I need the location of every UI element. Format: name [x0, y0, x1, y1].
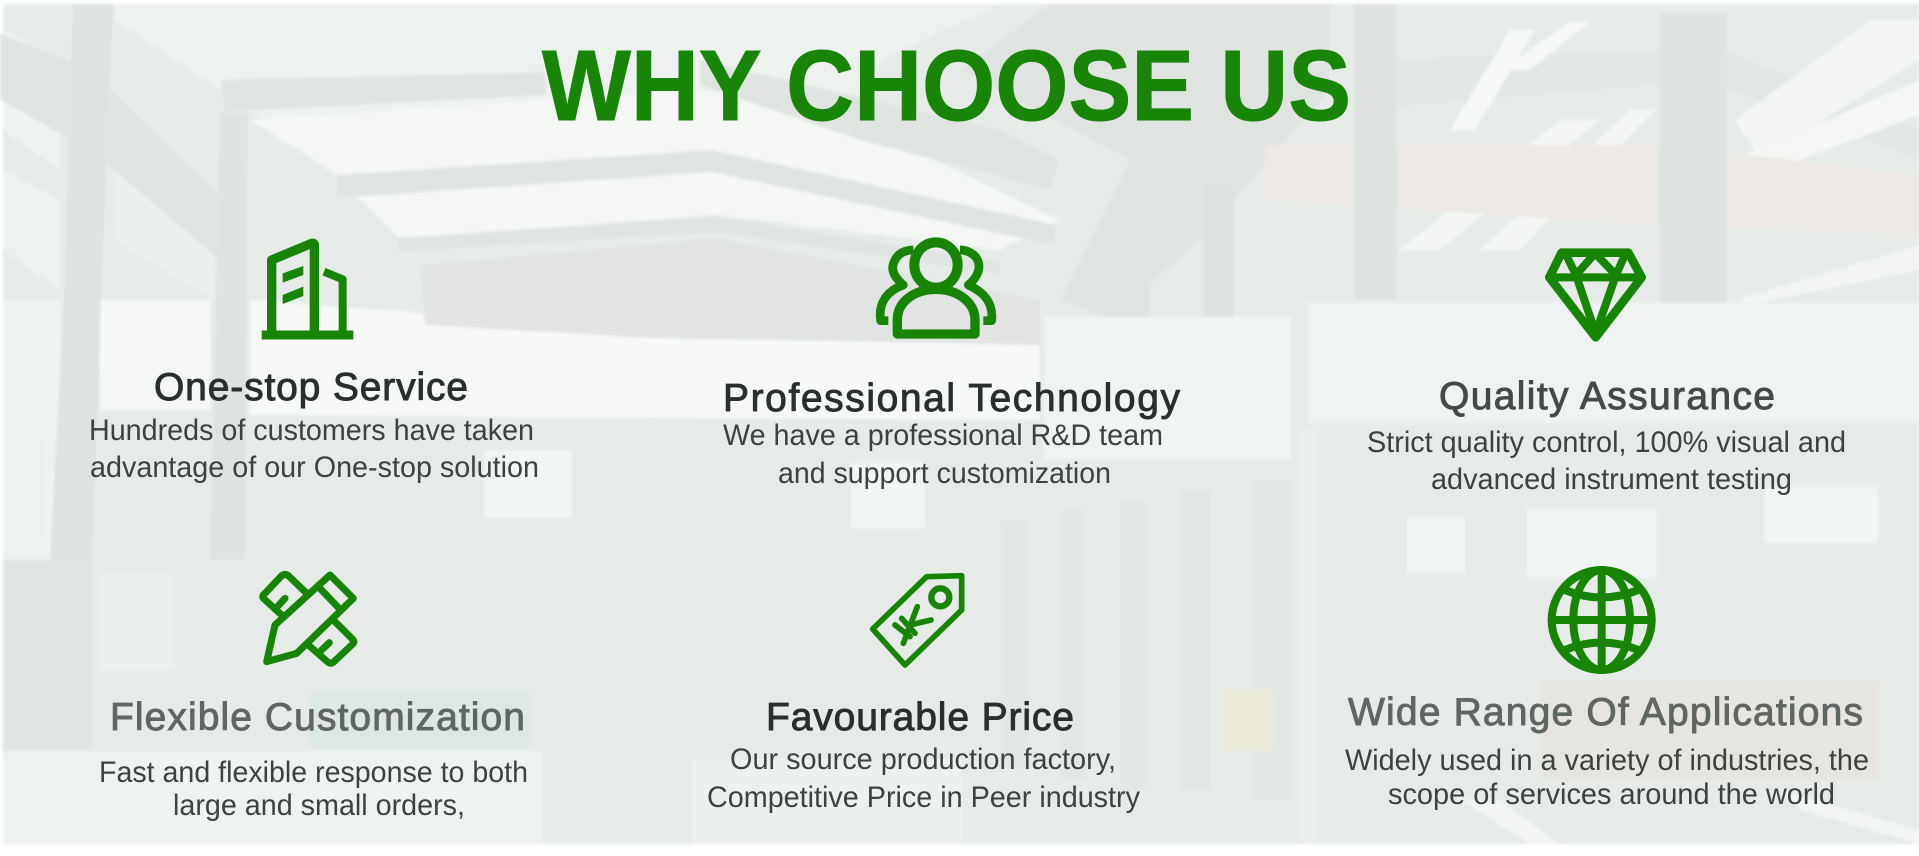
description: We have a professional R&D team — [723, 419, 1163, 452]
description: Fast and flexible response to both — [99, 756, 528, 789]
heading: Quality Assurance — [1439, 375, 1775, 418]
panel: professional technology — [723, 242, 1180, 490]
panel: one-stop service — [89, 243, 539, 484]
description: Hundreds of customers have taken — [89, 414, 534, 447]
icon: price tag — [873, 576, 962, 665]
heading: Favourable Price — [766, 696, 1074, 739]
icon: globe — [1552, 570, 1652, 670]
description: large and small orders, — [173, 789, 465, 822]
heading: Flexible Customization — [110, 696, 525, 739]
description — [1345, 744, 1869, 811]
description — [723, 419, 1163, 490]
description: Competitive Price in Peer industry — [707, 781, 1140, 814]
description: Our source production factory, — [730, 743, 1116, 776]
description: advantage of our One-stop solution — [90, 451, 539, 484]
icon: diamond — [1549, 253, 1642, 337]
description — [707, 743, 1140, 814]
panel: quality assurance — [1367, 253, 1846, 496]
icon: team of people — [880, 242, 992, 334]
heading: One-stop Service — [154, 366, 468, 409]
description — [1367, 426, 1846, 496]
icon: ruler and pencil — [263, 574, 354, 663]
description — [99, 756, 528, 822]
title: WHY CHOOSE US — [542, 30, 1351, 142]
panel: flexible customization — [99, 574, 528, 822]
panel: favourable price — [707, 576, 1140, 814]
heading: Wide Range Of Applications — [1348, 691, 1863, 734]
icon: building — [262, 243, 353, 335]
description: advanced instrument testing — [1431, 463, 1792, 496]
description: Strict quality control, 100% visual and — [1367, 426, 1846, 459]
description: scope of services around the world — [1388, 778, 1835, 811]
panel: wide range of applications — [1345, 570, 1869, 811]
description — [89, 414, 539, 484]
heading: Professional Technology — [723, 377, 1180, 420]
description: Widely used in a variety of industries, the — [1345, 744, 1869, 777]
description: and support customization — [778, 457, 1111, 490]
